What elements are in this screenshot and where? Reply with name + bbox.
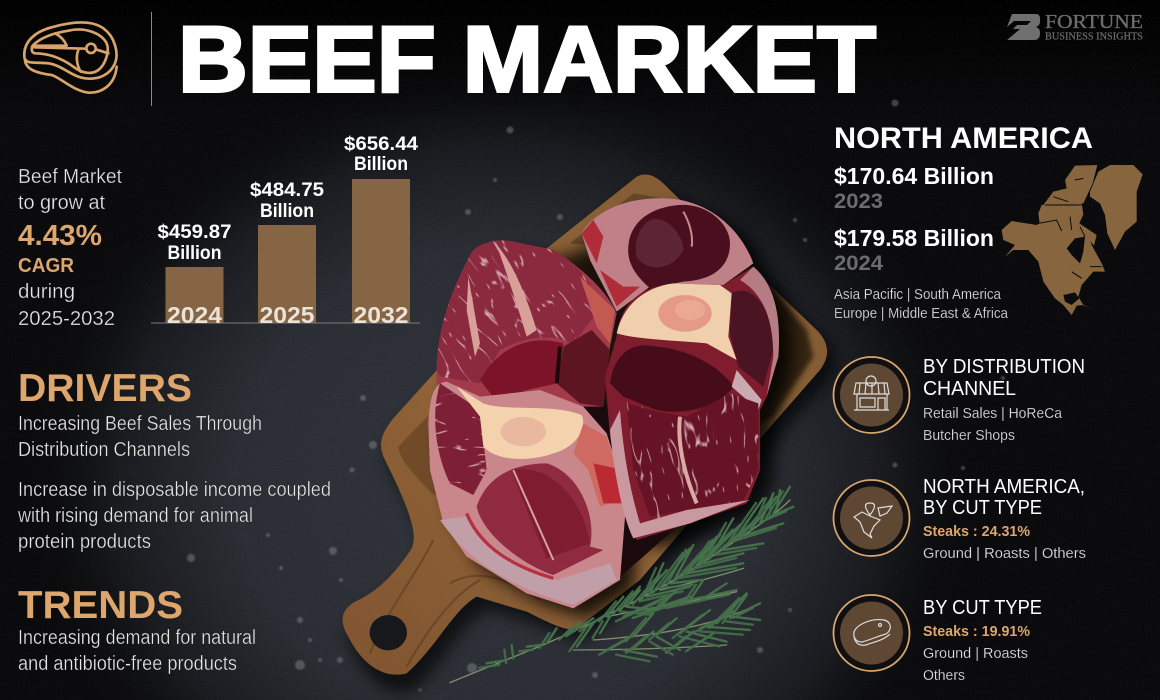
panel: drivers: Distribution Channels (18, 439, 190, 461)
panel: by distribution channel: Butcher Shops (923, 428, 1015, 444)
panel: by cut type: Ground | Roasts (923, 646, 1028, 662)
logo: Fortune Business Insights: FORTUNE (1045, 11, 1143, 33)
panel: drivers: Increasing Beef Sales Through (18, 413, 262, 435)
panel: by distribution channel: CHANNEL (923, 378, 1016, 400)
divider (151, 12, 152, 106)
bar chart: market size: Billion (354, 154, 408, 175)
panel: drivers: protein products (18, 531, 151, 553)
panel: by cut type (834, 595, 1042, 684)
callout: CAGR text: during (18, 281, 75, 303)
bar chart: market size: 2024 (167, 302, 222, 328)
panel: North America figures: Asia Pacific | South America (834, 287, 1002, 303)
panel: trends: Increasing demand for natural (18, 627, 256, 649)
callout: CAGR text (18, 166, 122, 330)
panel: by distribution channel: BY DISTRIBUTION (923, 356, 1085, 378)
shank lower left with bone (428, 382, 625, 608)
panel: by cut type: Others (923, 668, 965, 684)
panel: by distribution channel (834, 356, 1085, 444)
panel: North America by cut type: Steaks : 24.31% (923, 524, 1030, 540)
panel: North America figures (834, 122, 1093, 322)
bar chart: market size: 2025 (260, 302, 315, 328)
panel: North America figures: $179.58 Billion (834, 225, 994, 251)
panel: North America by cut type: BY CUT TYPE (923, 497, 1042, 519)
panel: trends: and antibiotic-free products (18, 653, 237, 675)
bar chart: market size (151, 134, 420, 328)
cutting board (343, 174, 835, 693)
bar chart: market size: Billion (168, 243, 222, 264)
icon: steak logo (24, 23, 117, 93)
panel: trends: TRENDS (18, 584, 183, 627)
panel: drivers: DRIVERS (18, 367, 192, 410)
callout: CAGR text: Beef Market (18, 166, 122, 188)
panel: North America by cut type: Ground | Roasts | Others (923, 546, 1086, 562)
icon: shop (834, 357, 910, 433)
logo: Fortune Business Insights: BUSINESS INSIGHTS (1045, 32, 1143, 42)
bar chart: market size: $484.75 (250, 180, 324, 201)
rosemary sprig (450, 487, 793, 683)
bar chart: market size: Billion (260, 201, 314, 222)
bar chart: market size: $656.44 (344, 134, 418, 155)
beef shanks (428, 198, 801, 626)
panel: North America figures: 2024 (834, 252, 883, 275)
shank top right (582, 198, 753, 312)
panel: North America figures: NORTH AMERICA (834, 122, 1093, 155)
callout: CAGR text: CAGR (18, 255, 75, 277)
panel: drivers (17, 367, 331, 553)
callout: CAGR text: 2025-2032 (18, 308, 115, 330)
icon: steak (834, 595, 910, 671)
panel: by cut type: BY CUT TYPE (923, 597, 1042, 619)
title: BEEF MARKET (178, 6, 876, 112)
shank upper left (436, 240, 617, 407)
panel: North America figures: 2023 (834, 190, 883, 213)
icon: North America map (1002, 165, 1143, 315)
callout: CAGR text: to grow at (18, 192, 105, 214)
bar chart: market size: $459.87 (158, 222, 232, 243)
logo: Fortune Business Insights (1007, 11, 1143, 42)
shank right with bone (605, 266, 780, 540)
panel: drivers: with rising demand for animal (17, 505, 253, 527)
panel: trends (18, 584, 256, 675)
panel: North America by cut type: NORTH AMERICA, (923, 476, 1085, 498)
photo: cutting board with beef shanks and rosemary (342, 174, 838, 698)
panel: drivers: Increase in disposable income coupled (18, 479, 331, 501)
panel: North America figures: Europe | Middle East & Africa (834, 306, 1009, 322)
panel: by distribution channel: Retail Sales | HoReCa (923, 406, 1063, 422)
panel: North America by cut type (834, 476, 1086, 562)
panel: by cut type: Steaks : 19.91% (923, 624, 1030, 640)
panel: North America figures: $170.64 Billion (834, 163, 994, 189)
bar chart: market size: 2032 (354, 302, 408, 328)
callout: CAGR text: 4.43% (18, 220, 102, 252)
icon: map pin (834, 480, 910, 556)
